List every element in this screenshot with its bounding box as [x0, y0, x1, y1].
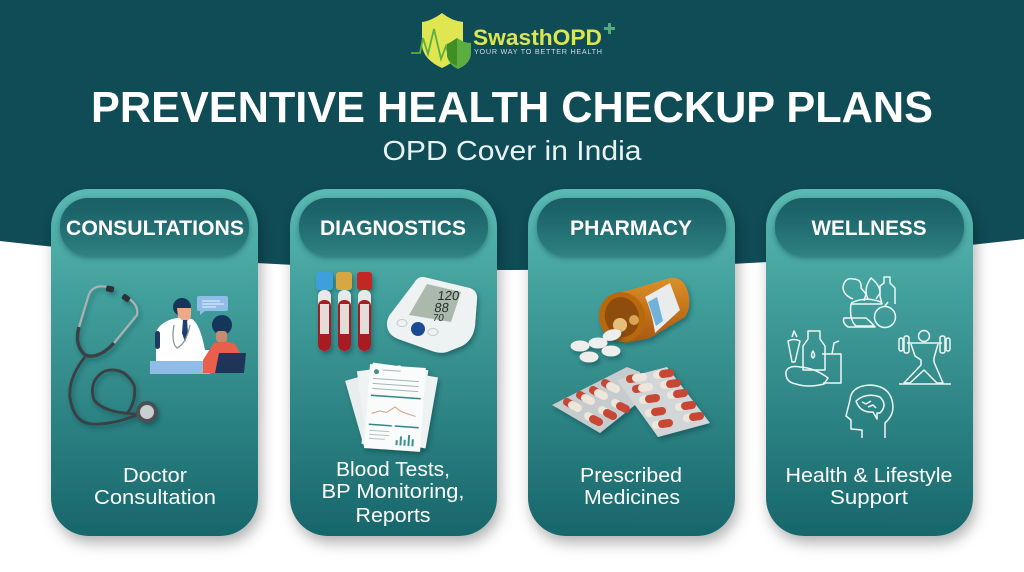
label: doctor consultation: Doctor — [123, 465, 187, 487]
icon: blood pressure monitor: 88 — [434, 300, 450, 315]
icon: loose tablets — [570, 327, 623, 362]
logo — [411, 13, 615, 69]
label: health and lifestyle support: Health & Lifestyle — [786, 465, 952, 487]
label: prescribed medicines: Prescribed — [580, 465, 682, 487]
subtitle: OPD Cover in India — [382, 135, 642, 166]
title: PREVENTIVE HEALTH CHECKUP PLANS — [91, 83, 933, 132]
tagline: YOUR WAY TO BETTER HEALTH — [474, 47, 602, 56]
icon: blood tubes — [316, 272, 372, 351]
header background — [0, 0, 1024, 270]
icon: plus — [604, 23, 615, 34]
label: prescribed medicines: Medicines — [584, 487, 680, 509]
icon: blister packs — [552, 367, 710, 437]
heading pill: wellness: WELLNESS — [812, 217, 926, 240]
label: doctor consultation — [94, 465, 216, 509]
panel: pharmacy — [528, 189, 735, 536]
icon: blood pressure monitor — [387, 277, 477, 353]
brand name: SwasthOPD — [473, 25, 602, 50]
label: diagnostics services: Blood Tests, — [336, 459, 450, 481]
icon: blood pressure monitor: 120 — [437, 288, 460, 303]
label: prescribed medicines — [580, 465, 682, 509]
panel: consultations — [51, 189, 258, 536]
icon: stethoscope — [70, 285, 158, 424]
icon: head with brain — [846, 385, 893, 438]
panel: wellness — [766, 189, 973, 536]
heading pill: pharmacy — [537, 198, 726, 256]
icon: shield logo — [411, 13, 471, 69]
icon: doctor with patient — [150, 296, 246, 374]
heading pill: diagnostics — [299, 198, 488, 256]
heading pill: consultations: CONSULTATIONS — [66, 217, 244, 240]
icon: medical reports — [345, 362, 438, 452]
heading pill: consultations — [60, 198, 249, 256]
label: diagnostics services: Reports — [356, 505, 430, 527]
icon: healthy food bowl — [843, 277, 896, 328]
panel: diagnostics — [290, 189, 497, 536]
icon: nutrition drinks — [786, 331, 841, 386]
icon: weightlifter — [899, 330, 951, 384]
heading pill: wellness — [775, 198, 964, 256]
heading pill: diagnostics: DIAGNOSTICS — [320, 217, 466, 240]
heading pill: pharmacy: PHARMACY — [570, 217, 692, 240]
label: health and lifestyle support: Support — [830, 487, 908, 509]
label: diagnostics services: BP Monitoring, — [322, 481, 464, 503]
label: diagnostics services — [322, 459, 464, 527]
label: health and lifestyle support — [786, 465, 952, 509]
icon: blood pressure monitor: 70 — [432, 313, 445, 324]
icon: pill bottle — [593, 278, 689, 347]
label: doctor consultation: Consultation — [94, 487, 216, 509]
